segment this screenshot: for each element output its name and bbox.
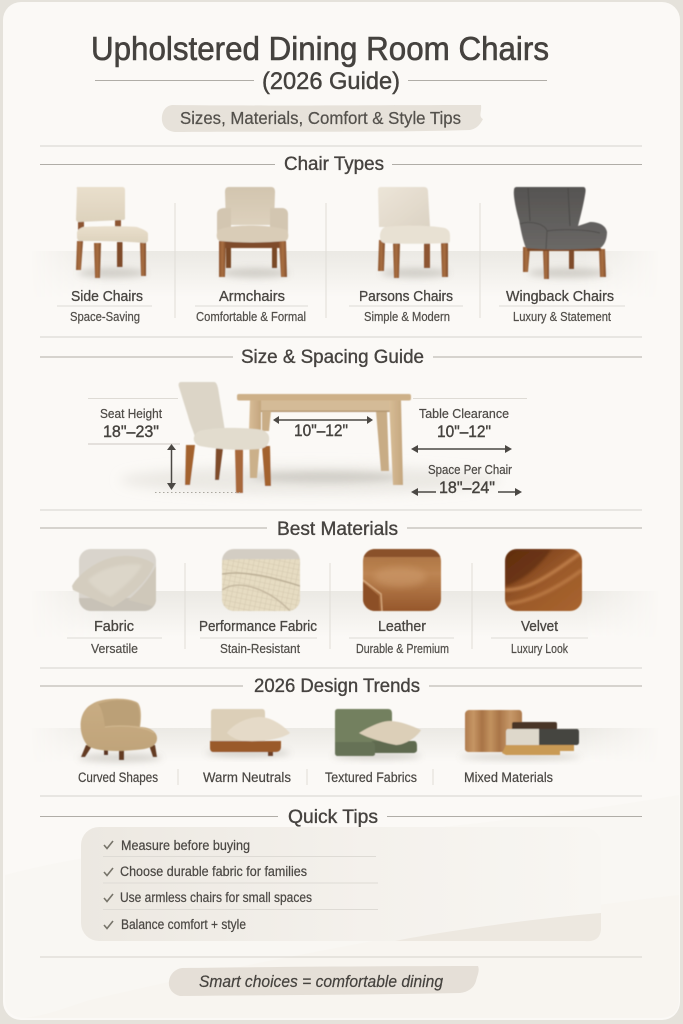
title: Upholstered Dining Room Chairs [91,30,549,67]
labels: chair types: Space-Saving [70,310,140,324]
callout: table clearance [411,398,527,453]
icon: side chair [76,187,148,278]
labels: materials: Stain-Resistant [220,642,300,656]
labels: chair types: Simple & Modern [364,310,450,324]
labels: trends [78,769,553,785]
subtitle brush pill [162,105,483,132]
diagram: chair and table [120,382,500,494]
title [91,30,549,95]
callout: under-table width: 10"–12" [294,421,348,440]
tip 2: Choose durable fabric for families [120,864,307,879]
icon: parsons chair [378,187,450,278]
callout: seat height: 18"–23" [103,422,159,441]
dining chair [179,382,271,493]
callout: table clearance: Table Clearance [419,406,509,421]
closing brush pill [169,966,479,996]
icon: mixed materials [460,710,580,760]
labels: chair types: Luxury & Statement [513,310,611,324]
swatch: leather [363,549,441,611]
floor band: chair types [65,251,625,276]
heading: best materials: Best Materials [277,519,398,540]
labels: trends: Warm Neutrals [203,770,291,785]
heading: chair types: Chair Types [284,154,384,175]
callout: table clearance: 10"–12" [437,422,491,441]
callout: space per chair: Space Per Chair [428,462,513,477]
labels: chair types: Armchairs [219,289,285,305]
tip 4: Balance comfort + style [121,917,246,932]
labels: materials: Versatile [91,642,138,656]
table [237,394,411,485]
callout: space per chair [411,462,522,497]
heading: size and spacing: Size & Spacing Guide [241,347,424,368]
labels: chair types: Parsons Chairs [359,289,453,305]
icon: warm neutrals [206,709,290,757]
icon: curved chair [78,699,162,762]
swatch: fabric [72,549,156,611]
icon: wingback chair [514,187,608,279]
labels: trends: Mixed Materials [464,770,553,785]
labels: materials [67,619,588,656]
labels: materials: Durable & Premium [356,642,449,656]
icon: textured fabrics [333,709,421,760]
subtitle brush pill: Sizes, Materials, Comfort & Style Tips [180,108,461,128]
title: (2026 Guide) [262,68,400,95]
floor band: trends [65,728,625,746]
icon: armchair [217,187,289,278]
callout: under-table width [273,416,373,440]
swatch: velvet [505,549,582,611]
tip 3: Use armless chairs for small spaces [120,890,312,905]
labels: chair types: Wingback Chairs [506,289,614,305]
heading: quick tips: Quick Tips [288,807,378,828]
labels: materials: Fabric [94,619,134,635]
callout: seat height [88,398,240,492]
callout: seat height: Seat Height [100,406,162,421]
swatch: performance fabric [222,549,300,611]
labels: materials: Performance Fabric [199,619,317,635]
labels: chair types [57,289,625,324]
callout: space per chair: 18"–24" [439,478,495,497]
labels: materials: Luxury Look [511,642,569,656]
closing brush pill: Smart choices = comfortable dining [199,973,444,991]
labels: chair types: Side Chairs [71,289,143,305]
floor band: materials [65,591,625,616]
labels: materials: Leather [378,619,426,635]
labels: chair types: Comfortable & Formal [196,310,306,324]
tip 1: Measure before buying [121,838,250,853]
labels: materials: Velvet [521,619,558,635]
heading: design trends: 2026 Design Trends [254,676,420,697]
labels: trends: Textured Fabrics [325,770,417,785]
labels: trends: Curved Shapes [78,770,158,785]
panel: quick tips [81,827,601,941]
